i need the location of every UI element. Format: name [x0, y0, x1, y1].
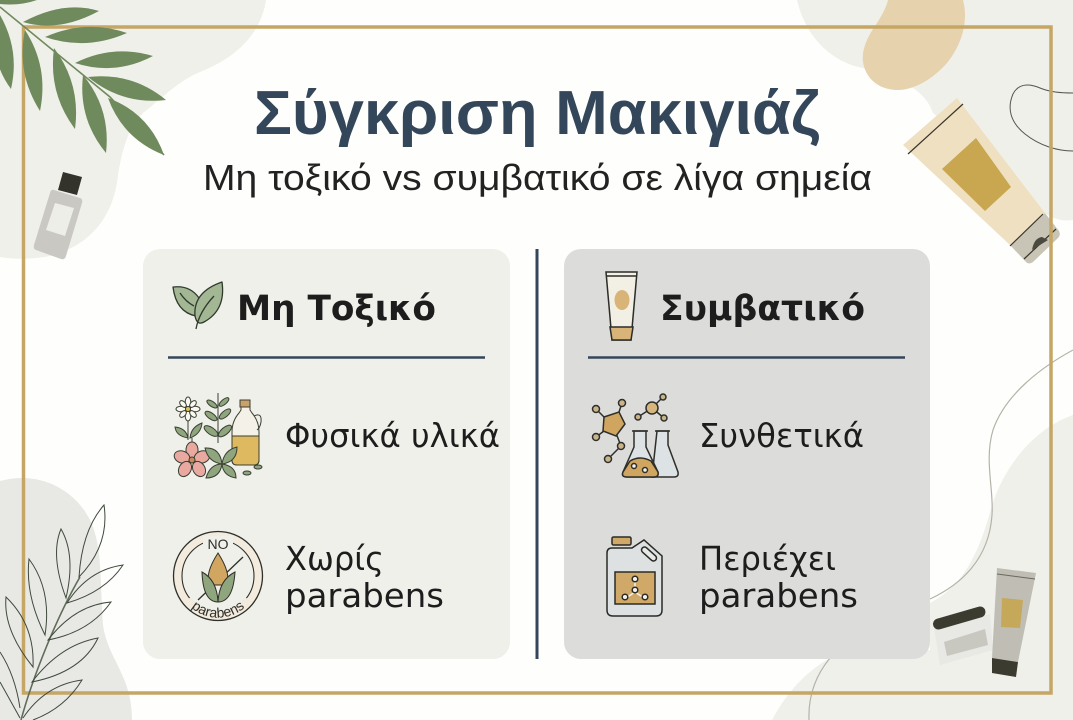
icon: natural ingredients: [172, 393, 262, 479]
thin curve: top right squiggle: [1010, 85, 1073, 151]
icon: no parabens badge: [172, 530, 264, 622]
item text: no parabens: Χωρίς: [285, 539, 384, 578]
item text: natural ingredients: Φυσικά υλικά: [285, 416, 500, 455]
icon: leaves: [173, 282, 223, 329]
background blob: top left: [0, 0, 266, 259]
background blob: bottom right: [772, 415, 1073, 720]
heading rule: [168, 356, 485, 359]
thin curve: bottom: [809, 658, 830, 720]
thin curve: right side: [930, 350, 1073, 599]
decoration: cream tube top right: [903, 98, 1060, 264]
panel: conventional: [564, 249, 930, 659]
item text: synthetic: Συνθετικά: [699, 416, 864, 455]
heading: conventional: Συμβατικό: [660, 289, 865, 329]
subtitle: Μη τοξικό vs συμβατικό σε λίγα σημεία: [203, 157, 872, 198]
decoration: jar and tube bottom right: [934, 568, 1036, 677]
icon: parabens canister: [607, 537, 662, 616]
decoration: palm leaves top left: [0, 0, 166, 155]
item text: parabens line: parabens: [285, 576, 444, 615]
heading rule: [588, 356, 905, 359]
icon: synthetic molecules and flasks: [592, 394, 678, 477]
heading: non-toxic: Μη Τοξικό: [237, 289, 436, 329]
panel background: [564, 249, 930, 659]
icon: no parabens badge: NO: [208, 536, 229, 552]
panel: non-toxic: [143, 249, 510, 659]
background blob: bottom left: [0, 478, 132, 720]
icon: no parabens badge: parabens: [190, 602, 244, 618]
decoration: small bottle top left: [34, 172, 82, 259]
decoration: fern bottom left: [0, 505, 123, 720]
item text: parabens line: parabens: [699, 576, 858, 615]
background blob: tan accent: [863, 0, 965, 90]
icon: tube: [606, 272, 637, 340]
panel background: [143, 249, 510, 659]
title: Σύγκριση Μακιγιάζ: [254, 79, 820, 148]
item text: contains: Περιέχει: [699, 539, 836, 578]
background blob: top right: [797, 0, 1073, 220]
vertical divider: [536, 249, 538, 659]
